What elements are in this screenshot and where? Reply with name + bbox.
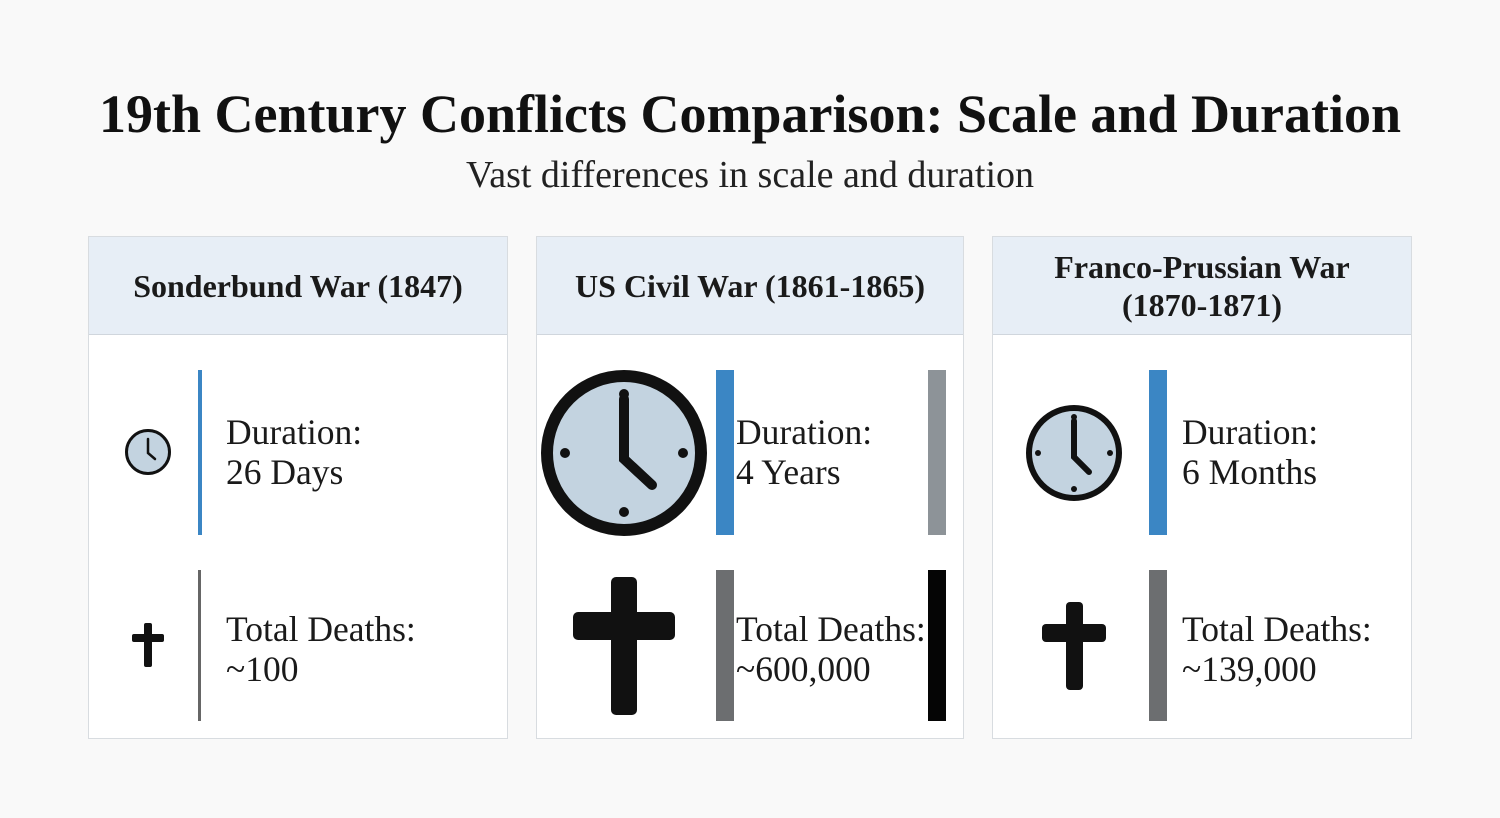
bar: deaths — [198, 570, 201, 721]
header — [537, 237, 963, 335]
panel: Sonderbund War — [88, 236, 508, 739]
header: Franco-Prussian War — [1054, 248, 1350, 284]
bar: duration — [198, 370, 202, 535]
bar: deaths gray — [716, 570, 734, 721]
duration text — [226, 412, 362, 492]
deaths text — [226, 609, 416, 689]
icon: clock large — [541, 370, 707, 536]
bar: duration gray — [928, 370, 946, 535]
bar: duration blue — [716, 370, 734, 535]
bar: deaths black — [928, 570, 946, 721]
bar: duration — [1149, 370, 1167, 535]
header — [993, 237, 1411, 335]
header: (1870-1871) — [1122, 286, 1282, 322]
icon: clock medium — [1026, 405, 1122, 501]
subtitle: Vast differences in scale and duration — [466, 154, 1034, 196]
deaths text: ~139,000 — [1182, 649, 1317, 689]
header: US Civil War (1861-1865) — [575, 268, 925, 304]
duration text: 4 Years — [736, 452, 841, 492]
icon: cross large — [573, 577, 675, 715]
duration text — [1182, 412, 1318, 492]
header — [89, 237, 507, 335]
icon: cross small — [132, 623, 164, 667]
deaths text: ~600,000 — [736, 649, 871, 689]
deaths text — [1182, 609, 1372, 689]
icon: cross medium — [1042, 602, 1106, 690]
duration text: 6 Months — [1182, 452, 1317, 492]
bar: deaths — [1149, 570, 1167, 721]
duration text: Duration: — [226, 412, 362, 452]
header: Sonderbund War (1847) — [133, 268, 463, 304]
title: 19th Century Conflicts Comparison: Scale and Duration — [99, 84, 1401, 144]
deaths text: ~100 — [226, 649, 298, 689]
deaths text: Total Deaths: — [736, 609, 926, 649]
duration text: Duration: — [736, 412, 872, 452]
duration text — [736, 412, 872, 492]
panel: Franco-Prussian War — [992, 236, 1412, 739]
duration text: 26 Days — [226, 452, 343, 492]
icon: clock small — [125, 429, 171, 475]
panel: US Civil War — [536, 236, 964, 739]
duration text: Duration: — [1182, 412, 1318, 452]
deaths text: Total Deaths: — [226, 609, 416, 649]
deaths text: Total Deaths: — [1182, 609, 1372, 649]
deaths text — [736, 609, 926, 689]
